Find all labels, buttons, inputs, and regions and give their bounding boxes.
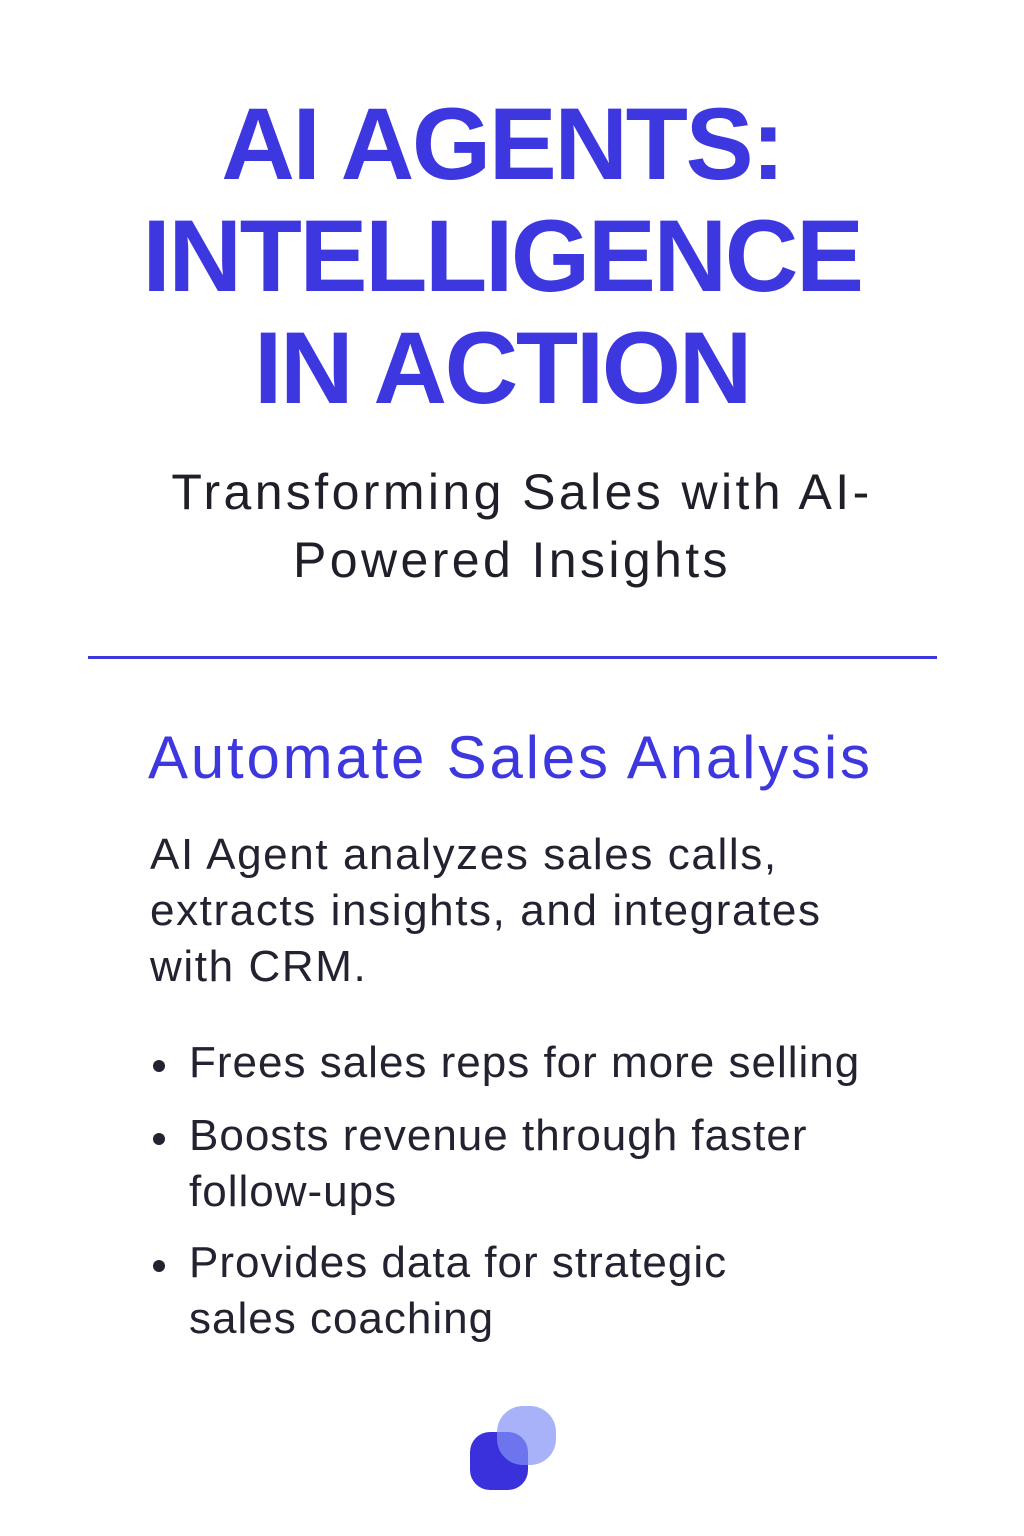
description: extracts insights, and integrates [150,886,822,935]
bullet list: Provides data for strategic [189,1238,727,1287]
description: AI Agent analyzes sales calls, [150,830,778,879]
bullet list: follow-ups [189,1167,397,1216]
subtitle: Transforming Sales with AI- [171,464,873,520]
title [142,87,862,425]
subtitle: Powered Insights [293,532,731,588]
subtitle [171,464,873,588]
section heading: Automate Sales Analysis [148,724,873,791]
bullet list: Frees sales reps for more selling [189,1038,860,1087]
bullet list: Boosts revenue through faster [189,1111,807,1160]
bullet list [153,1038,860,1343]
description: with CRM. [150,942,367,991]
title: AI AGENTS: [221,87,783,201]
bullet list: sales coaching [189,1294,494,1343]
icon: logo [470,1406,556,1490]
description [150,830,822,991]
title: INTELLIGENCE [142,199,862,313]
title: IN ACTION [254,311,750,425]
